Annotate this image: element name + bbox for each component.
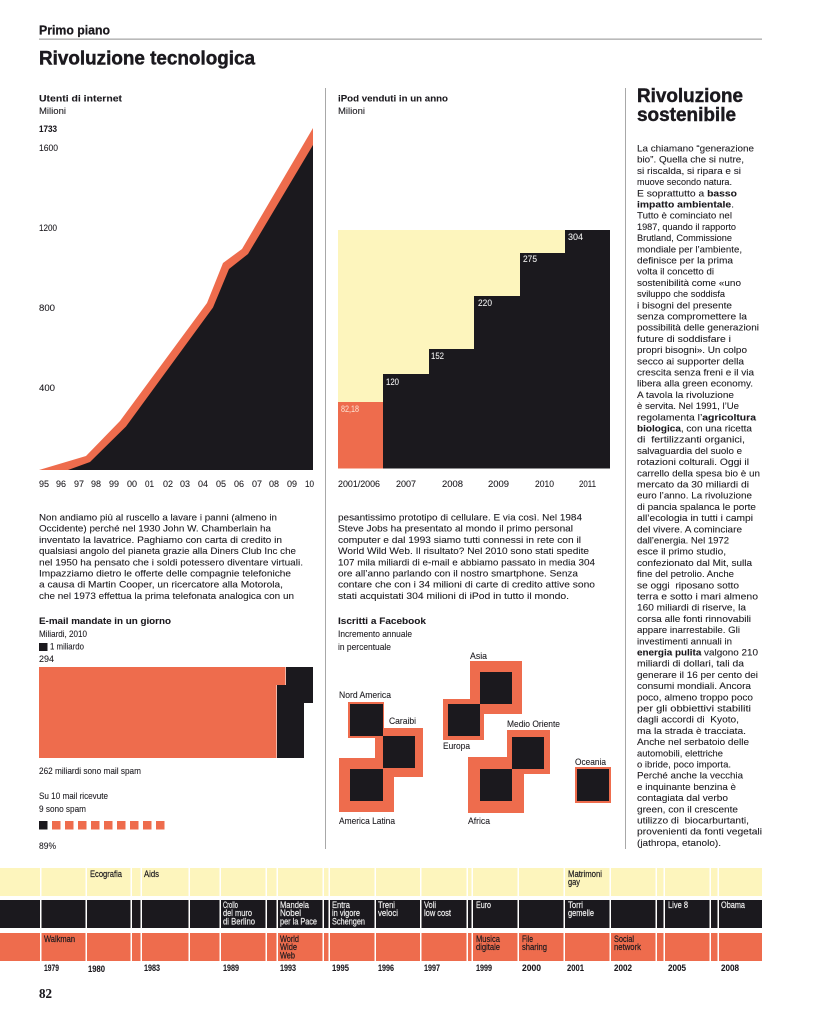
timeline years: 2002 [614,963,632,973]
sidebar text: salvaguardia del suolo e [637,446,742,457]
panel: iPod venduti in un anno [338,94,610,489]
chart heading: Milioni [39,105,66,116]
orange band labels: digitale [476,942,500,952]
sidebar text: muove secondo natura. [637,177,732,188]
iPod heading: Milioni [338,105,365,116]
nested squares: Asia and Europa [443,661,522,740]
black band labels: Voli [424,900,436,910]
step values: 304 [568,231,583,242]
timeline years: 2001 [567,963,584,973]
sidebar text: per gli obbiettivi stabiliti [637,704,751,714]
spam ratio text: 9 sono spam [39,803,86,814]
x axis labels [39,478,314,489]
y axis labels: 1733 [39,123,57,134]
year labels [338,478,596,489]
x axis labels: 05 [216,478,226,489]
black band labels: in vigore [332,908,360,918]
yellow band labels: Matrimoni [568,869,602,879]
timeline years: 1996 [378,963,394,973]
sidebar text: di pancia spalanca le porte [637,502,756,513]
timeline years: 1997 [424,963,440,973]
yellow band labels: Ecografia [90,869,123,879]
timeline years: 1983 [144,963,160,973]
region labels: Africa [468,815,491,826]
orange band labels: Web [280,950,295,960]
sidebar text: investimenti annuali in [637,636,732,647]
email heading: Miliardi, 2010 [39,628,87,639]
Facebook heading: Incremento annuale [338,628,412,639]
orange band labels: Wide [280,942,297,952]
text block: middle column: stati acquistati 304 milioni di iPod in tutto il mondo. [338,591,569,602]
sidebar text: miliardi di dollari, tali da [637,659,745,670]
x axis labels: 95 [39,478,49,489]
timeline years: 2000 [522,963,541,973]
year labels: 2010 [535,478,554,489]
step values: 120 [386,376,399,387]
nested squares: Medio Oriente and Africa [468,730,550,813]
timeline years: 2008 [721,963,739,973]
panel: e-mail mandate in un giorno [39,616,313,851]
timeline years: 2005 [668,963,686,973]
black band labels: veloci [378,908,398,918]
legend: 1 miliardo [39,640,84,652]
orange band labels: File [522,934,533,944]
y axis labels: 1200 [39,222,57,233]
sidebar text: 160 miliardi di riserve, la [637,603,747,614]
x axis labels: 00 [127,478,137,489]
sidebar text: possibilità delle generazioni [637,323,759,334]
sidebar text: è servita. Nel 1991, l’Ue [637,401,739,412]
sidebar text: La chiamano “generazione [637,144,754,154]
yellow band labels: gay [568,877,580,887]
sidebar text: fine del petrolio. Anche [637,569,734,580]
sidebar text: appare inarrestabile. Gli [637,625,740,636]
black band labels: gemelle [568,908,594,918]
text block: left column [39,512,303,602]
sidebar heading: Rivoluzione [637,86,743,107]
sidebar text: poco, almeno troppo poco [637,692,753,703]
sidebar text: definisce per la prima [637,256,734,266]
sidebar text: Anche nel serbatoio delle [637,737,749,748]
iPod heading [338,94,448,116]
x axis labels: 04 [198,478,208,489]
timeline years: 1989 [223,963,239,973]
x axis labels: 96 [56,478,66,489]
black band labels: Live 8 [668,900,688,910]
timeline years: 1999 [476,963,492,973]
sidebar text: regolamenta l’ agricoltura [637,412,757,423]
nested squares: America group [339,702,423,812]
chart heading: Utenti di internet [39,94,123,104]
orange band labels: Social [614,934,634,944]
region labels: Nord America [339,689,392,700]
sidebar text: crescita senza freni e il via [637,368,755,378]
sidebar text: generare il 16 per cento dei [637,670,758,681]
sidebar text: (jathropa, etanolo). [637,838,721,849]
region labels: Asia [470,650,488,661]
sidebar text: future di soddisfare i [637,334,731,345]
sidebar text: Perché anche la vecchia [637,771,744,782]
sidebar text: secco ai supporter della [637,356,745,367]
y axis labels: 400 [39,382,55,393]
black band labels [223,900,746,926]
sidebar text: 1987, quando il rapporto [637,222,736,233]
black band labels: Nobel [280,908,301,918]
stepped chart [338,230,610,468]
text block: middle column: World Wild Web. Il risultato? Nel 2010 sono stati spedite [338,546,589,557]
sidebar text: mondiale per l’ambiente, [637,244,742,255]
black band labels: Crollo [223,900,238,910]
text block: middle column: contare che con i 34 milioni di carte di credito attive sono [338,580,595,591]
chart heading [39,94,123,116]
Facebook heading: in percentuale [338,641,391,652]
yellow band labels: Aids [144,869,159,879]
sidebar text: o ibride, poco importa. [637,760,731,770]
x axis labels: 99 [109,478,119,489]
sidebar text: E soprattutto a basso [637,188,737,199]
sidebar text: e inquinante benzina è [637,782,736,793]
sidebar text: i bisogni del presente [637,300,732,311]
page number: 82 [39,987,52,1002]
panel: rivoluzione sostenibile [637,86,762,849]
sidebar text: rotazioni colturali. Oggi il [637,457,749,468]
year labels: 2009 [488,478,509,489]
sidebar text: contagiata dal verbo [637,793,728,804]
text block: left column: che nel 1973 effettua la prima telefonata analogica con un [39,591,294,602]
step values [341,231,583,414]
text block: middle column: ore all’anno parlando con il nostro smartphone. Senza [338,568,579,580]
email block chart [39,667,313,758]
sidebar text: corsa alle fonti rinnovabili [637,614,751,625]
orange band labels: Walkman [44,934,75,944]
timeline years: 1993 [280,963,296,973]
sidebar text: utilizzo di biocarburtanti, [637,816,749,826]
y axis labels [39,123,58,393]
sidebar text: bio”. Quella che si nutre, [637,155,744,166]
black band labels: Treni [378,900,395,910]
orange band labels: World [280,934,299,944]
x axis labels: 03 [180,478,190,489]
sidebar text: provenienti da fonti vegetali [637,827,762,838]
black band labels: low cost [424,908,451,918]
step values: 275 [523,253,537,264]
x axis labels: 02 [163,478,173,489]
sidebar heading: sostenibile [637,105,736,126]
year labels: 2011 [579,478,596,489]
x axis labels: 98 [91,478,101,489]
sidebar text: automobili, elettriche [637,748,723,759]
sidebar text [637,144,762,849]
sidebar text: consumi mondiali. Ancora [637,681,752,692]
spam caption: 262 miliardi sono mail spam [39,765,141,776]
email heading: E-mail mandate in un giorno [39,616,171,627]
black band labels: per la Pace [280,916,317,926]
region labels: Caraibi [389,715,416,726]
black band labels: Obama [721,900,746,910]
y axis labels: 1600 [39,142,58,153]
sidebar text: ma la strada è tracciata. [637,726,746,737]
text block: middle column: 107 mila miliardi di e-mail e abbiamo passato in media 304 [338,557,596,568]
x axis labels: 07 [252,478,262,489]
section header: Primo piano [39,24,110,38]
year labels: 2001/2006 [338,478,380,489]
year labels: 2008 [442,478,463,489]
sidebar text: Tutto è cominciato nel [637,211,732,222]
Facebook heading: Iscritti a Facebook [338,616,427,627]
ten squares pictogram [39,821,164,830]
black band labels: Entra [332,900,351,910]
region labels [339,650,607,826]
step values: 152 [431,350,444,361]
region labels: Oceania [575,756,607,767]
text block: left column: a causa di Martin Cooper, un ricercatore alla Motorola, [39,580,283,591]
timeline bands [0,866,762,963]
y axis labels: 800 [39,302,55,313]
sidebar text: volta il concetto di [637,267,714,278]
orange band labels: network [614,942,641,952]
text block: middle column: computer e dal 1993 siamo tutti connessi in rete con il [338,535,581,546]
timeline [0,866,762,974]
x axis labels: 06 [234,478,244,489]
sidebar text: mercato da 30 miliardi di [637,480,749,490]
panel: iscritti a Facebook [338,616,611,826]
sidebar text: dagli accordi di Kyoto, [637,715,739,726]
sidebar text: A tavola la rivoluzione [637,390,734,401]
email heading [39,616,171,639]
iPod heading: iPod venduti in un anno [338,94,448,104]
sidebar text: del vivere. A cominciare [637,524,742,535]
orange band labels [44,934,641,960]
Facebook heading [338,616,427,652]
timeline years [44,963,739,974]
sidebar text: si riscalda, si ripara e si [637,166,741,177]
sidebar text: confezionato dal Mit, sulla [637,558,753,569]
x axis labels: 09 [287,478,297,489]
sidebar text: esce il primo studio, [637,547,726,558]
sidebar text: sostenibilità come «uno [637,278,741,289]
x axis labels: 97 [74,478,84,489]
title: Rivoluzione tecnologica [39,48,255,70]
area chart [39,128,313,470]
x axis labels: 08 [269,478,279,489]
black band labels: di Berlino [223,916,255,926]
sidebar text: impatto ambientale . [637,200,734,210]
sidebar text: libera alla green economy. [637,379,753,390]
sidebar text: senza compromettere la [637,312,748,322]
text block: left column: Non andiamo più al ruscello a lavare i panni (almeno in [39,512,277,524]
sidebar text: carrello della spesa bio è un [637,468,760,479]
sidebar text: energia pulita valgono 210 [637,648,758,658]
black band labels: Mandela [280,900,310,910]
spam ratio text: Su 10 mail ricevute [39,790,108,801]
step values: 82,18 [341,403,359,414]
black band labels: Euro [476,900,491,910]
sidebar heading [637,86,743,126]
sidebar text: all’ecologia in tutti i campi [637,513,753,524]
step values: 220 [478,297,492,308]
region labels: Europa [443,740,471,751]
region labels: America Latina [339,815,396,826]
text block: middle column [338,512,596,602]
text block: middle column: pesantissimo prototipo di cellulare. E via così. Nel 1984 [338,512,583,524]
sidebar text: sviluppo che soddisfa [637,289,726,300]
orange band labels: Musica [476,934,501,944]
timeline years: 1980 [88,964,105,974]
black band labels: del muro [223,908,252,918]
black band labels: Torri [568,900,583,910]
timeline years: 1995 [332,963,349,973]
text block: middle column: Steve Jobs ha presentato al mondo il primo personal [338,524,573,535]
sidebar text: propri bisogni». Un colpo [637,345,747,356]
x axis labels: 10 [305,478,314,489]
sidebar text: Brutland, Commissione [637,233,732,244]
panel: utenti di internet [39,94,314,489]
text block: left column: qualsiasi angolo del pianeta grazie alla Diners Club Inc che [39,546,296,557]
text block: left column: Impazziamo dietro le offerte delle compagnie telefoniche [39,568,291,580]
percentage: 89% [39,840,56,851]
text block: left column: inventato la lavatrice. Paghiamo con carta di credito in [39,535,282,546]
nested square: Oceania [575,767,611,803]
yellow band labels [90,869,602,887]
total value: 294 [39,653,54,664]
text block: left column: Occidente) perché nel 1930 John W. Chamberlain ha [39,524,272,535]
legend: 1 miliardo: 1 miliardo [50,640,84,652]
black band labels: Schengen [332,916,365,926]
sidebar text: terra e sotto i mari almeno [637,592,758,602]
region labels: Medio Oriente [507,718,560,729]
spam ratio text [39,790,108,814]
sidebar text: di fertilizzanti organici, [637,435,745,446]
sidebar text: euro l’anno. La rivoluzione [637,491,752,502]
sidebar text: green, con il crescente [637,804,738,815]
sidebar text: se oggi riposano sotto [637,580,739,591]
sidebar text: biologica, con una ricetta [637,424,753,434]
orange band labels: sharing [522,942,547,952]
timeline years: 1979 [44,963,59,973]
x axis labels: 01 [145,478,154,489]
year labels: 2007 [396,478,416,489]
sidebar text: dall’energia. Nel 1972 [637,536,729,546]
text block: left column: nel 1950 ha pensato che i soldi potessero diventare virtuali. [39,557,303,568]
